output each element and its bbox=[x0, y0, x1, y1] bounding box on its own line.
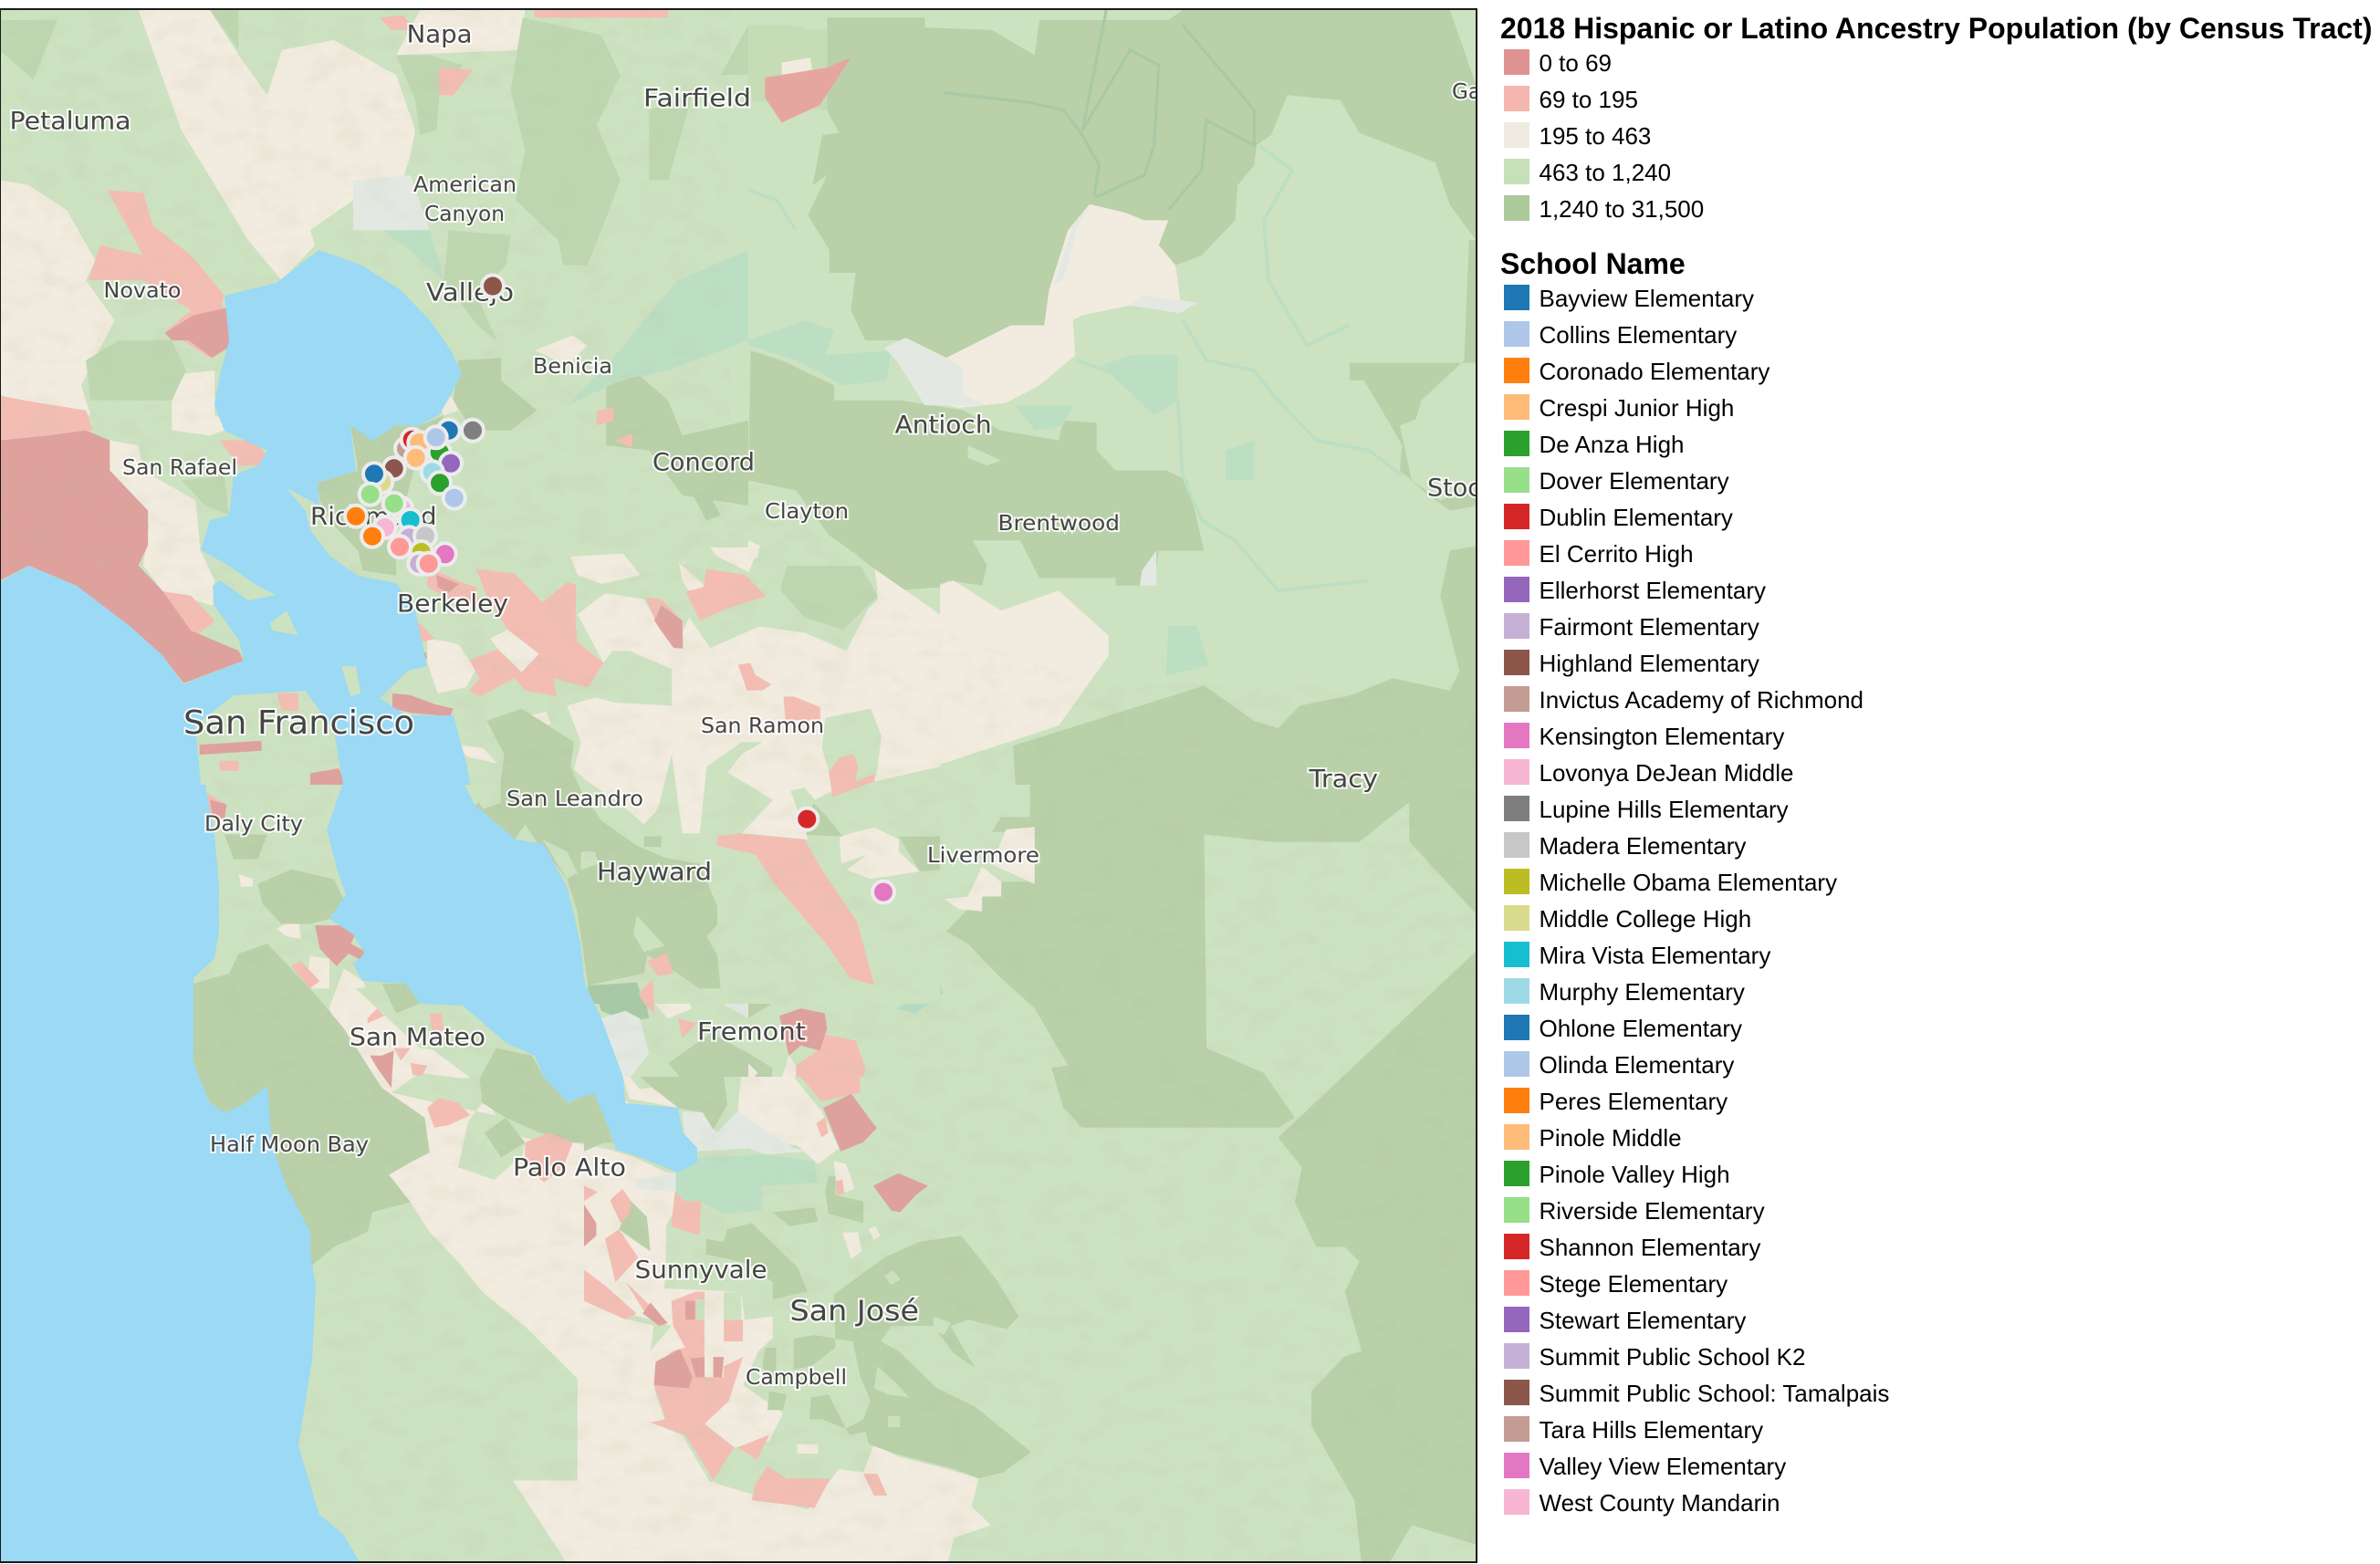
marker: Stege Elementary bbox=[418, 553, 440, 575]
legend row: Pinole Middle bbox=[1504, 1124, 2325, 1150]
legend row: El Cerrito High bbox=[1504, 540, 2325, 566]
legend row: Lupine Hills Elementary: Lupine Hills Elementary bbox=[1539, 796, 1789, 823]
legend row: Highland Elementary bbox=[1504, 650, 2325, 675]
legend row: Valley View Elementary bbox=[1504, 1453, 2325, 1478]
label: Benicia: Benicia bbox=[533, 355, 612, 379]
marker: Middle College High bbox=[371, 471, 392, 493]
label: Novato: Novato bbox=[104, 279, 181, 303]
legend row: Madera Elementary bbox=[1504, 832, 2325, 858]
legend row: Middle College High bbox=[1504, 905, 2325, 931]
legend row: 69 to 195: 69 to 195 bbox=[1539, 86, 1638, 113]
legend row: Ellerhorst Elementary bbox=[1504, 577, 2325, 602]
label: Palo Alto: Palo Alto bbox=[513, 1153, 626, 1183]
label: Petaluma: Petaluma bbox=[9, 108, 131, 135]
legend row: Dublin Elementary: Dublin Elementary bbox=[1539, 504, 1733, 531]
legend row: Summit Public School K2 bbox=[1504, 1343, 2325, 1369]
marker: Pinole Middle bbox=[405, 447, 427, 469]
label: San Francisco: San Francisco bbox=[183, 704, 414, 742]
label: Tracy: Tracy bbox=[1308, 765, 1378, 794]
legend row: Invictus Academy of Richmond bbox=[1504, 686, 2325, 712]
legend row: Stewart Elementary: Stewart Elementary bbox=[1539, 1307, 1746, 1334]
legend row: Lovonya DeJean Middle bbox=[1504, 759, 2325, 785]
legend row: Tara Hills Elementary bbox=[1504, 1416, 2325, 1442]
label: San Rafael: San Rafael bbox=[122, 456, 237, 480]
legend row: Collins Elementary: Collins Elementary bbox=[1539, 321, 1737, 349]
marker: Mira Vista Elementary bbox=[400, 509, 422, 531]
marker: Dover Elementary bbox=[383, 493, 405, 515]
legend row: De Anza High: De Anza High bbox=[1539, 431, 1684, 458]
label: Campbell: Campbell bbox=[746, 1366, 847, 1390]
legend row: Shannon Elementary: Shannon Elementary bbox=[1539, 1234, 1760, 1261]
legend row: Stewart Elementary bbox=[1504, 1307, 2325, 1332]
legend row: 1,240 to 31,500: 1,240 to 31,500 bbox=[1539, 195, 1704, 223]
legend row: Riverside Elementary: Riverside Elementary bbox=[1539, 1197, 1765, 1225]
marker: Summit Public School K2 bbox=[408, 553, 430, 575]
map frame bbox=[0, 9, 1477, 1562]
marker: Olinda Elementary bbox=[444, 487, 465, 509]
marker: Ohlone Elementary bbox=[363, 463, 385, 485]
marker: Summit Public School: Tamalpais bbox=[482, 276, 504, 297]
legend row: Pinole Valley High: Pinole Valley High bbox=[1539, 1161, 1730, 1188]
place labels bbox=[9, 20, 1536, 1390]
marker: Pinole Valley High bbox=[429, 472, 451, 494]
legend row: West County Mandarin: West County Mandarin bbox=[1539, 1489, 1780, 1517]
label: San Ramon: San Ramon bbox=[701, 714, 824, 738]
legend row: Highland Elementary: Highland Elementary bbox=[1539, 650, 1759, 677]
marker: Peres Elementary bbox=[361, 526, 383, 547]
East Bay detail overlay bbox=[392, 547, 940, 1004]
label: Brentwood: Brentwood bbox=[998, 512, 1120, 536]
marker: De Anza High bbox=[429, 442, 451, 464]
label: Antioch: Antioch bbox=[895, 411, 992, 440]
marker: Bayview Elementary bbox=[438, 420, 460, 442]
legend row: Dover Elementary: Dover Elementary bbox=[1539, 467, 1729, 495]
marker: Murphy Elementary bbox=[422, 461, 444, 483]
marker: Madera Elementary bbox=[414, 525, 436, 547]
legend row: Olinda Elementary: Olinda Elementary bbox=[1539, 1051, 1734, 1079]
legend row: West County Mandarin bbox=[1504, 1489, 2325, 1515]
label: San José: San José bbox=[790, 1295, 919, 1328]
legend row: Murphy Elementary: Murphy Elementary bbox=[1539, 978, 1745, 1006]
South Bay detail overlay bbox=[584, 1077, 1132, 1564]
legend row: Mira Vista Elementary bbox=[1504, 942, 2325, 967]
label: San Mateo: San Mateo bbox=[350, 1024, 485, 1051]
marker: Fairmont Elementary bbox=[398, 527, 420, 548]
legend row: Fairmont Elementary: Fairmont Elementary bbox=[1539, 613, 1759, 641]
map panel bbox=[0, 8, 1477, 1563]
school location markers bbox=[345, 276, 894, 903]
legend row: Peres Elementary: Peres Elementary bbox=[1539, 1088, 1728, 1115]
legend row: Pinole Valley High bbox=[1504, 1161, 2325, 1186]
legend row: Valley View Elementary: Valley View Elementary bbox=[1539, 1453, 1786, 1480]
marker: Coronado Elementary bbox=[345, 506, 367, 527]
label: Richmond: Richmond bbox=[310, 503, 436, 531]
label: Daly City: Daly City bbox=[204, 813, 303, 837]
marker: Crespi Junior High bbox=[408, 432, 430, 454]
legend row: Kensington Elementary: Kensington Elementary bbox=[1539, 723, 1784, 750]
legend row: Summit Public School K2: Summit Public School K2 bbox=[1539, 1343, 1805, 1371]
legend row: Mira Vista Elementary: Mira Vista Elementary bbox=[1539, 942, 1770, 969]
legend row: Fairmont Elementary bbox=[1504, 613, 2325, 639]
label: Berkeley: Berkeley bbox=[397, 589, 508, 619]
legend row: Crespi Junior High: Crespi Junior High bbox=[1539, 394, 1734, 422]
legend row: Ohlone Elementary bbox=[1504, 1015, 2325, 1040]
marker: Kensington Elementary bbox=[434, 543, 456, 565]
legend row: 0 to 69 bbox=[1504, 49, 1612, 77]
marker: Collins Elementary bbox=[425, 426, 447, 448]
marker: Tara Hills Elementary bbox=[395, 438, 417, 460]
legend row: Stege Elementary: Stege Elementary bbox=[1539, 1270, 1728, 1298]
legend row: Invictus Academy of Richmond: Invictus Academy of Richmond bbox=[1539, 686, 1863, 714]
legend row: Olinda Elementary bbox=[1504, 1051, 2325, 1077]
legend row: Michelle Obama Elementary: Michelle Obama Elementary bbox=[1539, 869, 1837, 896]
marker: El Cerrito High bbox=[389, 536, 411, 558]
label: Fremont: Fremont bbox=[697, 1018, 806, 1046]
legend row: Kensington Elementary bbox=[1504, 723, 2325, 748]
label: Half Moon Bay: Half Moon Bay bbox=[210, 1133, 369, 1157]
legend title: School Name: School Name bbox=[1500, 247, 1686, 280]
marker: Dublin Elementary bbox=[402, 429, 423, 451]
legend row: Lovonya DeJean Middle: Lovonya DeJean Middle bbox=[1539, 759, 1793, 787]
marker: Stewart Elementary bbox=[440, 453, 462, 474]
legend row: Lupine Hills Elementary bbox=[1504, 796, 2325, 821]
label: Sunnyvale: Sunnyvale bbox=[635, 1256, 767, 1285]
legend row: Summit Public School: Tamalpais bbox=[1504, 1380, 2325, 1405]
label: Stockton: Stockton bbox=[1427, 474, 1536, 502]
legend row: Summit Public School: Tamalpais: Summit Public School: Tamalpais bbox=[1539, 1380, 1889, 1407]
legend row: Stege Elementary bbox=[1504, 1270, 2325, 1296]
label: Livermore: Livermore bbox=[927, 844, 1039, 868]
legend: population by census tract bbox=[1500, 12, 2372, 223]
legend row: Michelle Obama Elementary bbox=[1504, 869, 2325, 894]
legend row: Tara Hills Elementary: Tara Hills Elementary bbox=[1539, 1416, 1763, 1444]
legend row: Pinole Middle: Pinole Middle bbox=[1539, 1124, 1682, 1152]
label: Vallejo: Vallejo bbox=[426, 279, 514, 307]
legend title: population: 2018 Hispanic or Latino Ancestry Population (by Census Tract) bbox=[1500, 12, 2372, 45]
label: Clayton: Clayton bbox=[765, 500, 849, 524]
marker: Riverside Elementary bbox=[360, 484, 381, 506]
legend row: Shannon Elementary bbox=[1504, 1234, 2325, 1259]
legend row: 463 to 1,240: 463 to 1,240 bbox=[1539, 159, 1671, 186]
legend row: El Cerrito High: El Cerrito High bbox=[1539, 540, 1694, 568]
basemap: census tract choropleth over land and water bbox=[0, 9, 1478, 1564]
marker: Lupine Hills Elementary bbox=[462, 420, 484, 442]
marker: Valley View Elementary bbox=[872, 881, 894, 903]
legend row: Ellerhorst Elementary: Ellerhorst Elementary bbox=[1539, 577, 1766, 604]
legend row: 0 to 69: 0 to 69 bbox=[1539, 49, 1612, 77]
label: Hayward: Hayward bbox=[597, 858, 712, 887]
legend row: Peres Elementary bbox=[1504, 1088, 2325, 1113]
legend row: Bayview Elementary: Bayview Elementary bbox=[1539, 285, 1754, 312]
legend row: Murphy Elementary bbox=[1504, 978, 2325, 1004]
label: Napa: Napa bbox=[407, 20, 473, 49]
legend row: 195 to 463: 195 to 463 bbox=[1539, 122, 1651, 150]
marker: Michelle Obama Elementary bbox=[411, 541, 433, 563]
marker: Highland Elementary bbox=[383, 457, 405, 479]
legend row: Coronado Elementary: Coronado Elementary bbox=[1539, 358, 1769, 385]
place labels beneath markers: Vallejo and Richmond bbox=[310, 279, 514, 531]
label: American: American bbox=[413, 173, 517, 197]
marker: Shannon Elementary bbox=[796, 808, 818, 830]
label: Canyon: Canyon bbox=[424, 203, 505, 226]
legend: school name bbox=[1500, 247, 1889, 1517]
legend row: Middle College High: Middle College High bbox=[1539, 905, 1751, 933]
label: Concord: Concord bbox=[652, 449, 755, 476]
legend row: Madera Elementary: Madera Elementary bbox=[1539, 832, 1746, 860]
label: San Leandro: San Leandro bbox=[506, 787, 643, 811]
marker: Ellerhorst Elementary bbox=[423, 442, 444, 464]
label: Galt: Galt bbox=[1452, 80, 1495, 104]
label: Fairfield: Fairfield bbox=[643, 84, 751, 113]
marker: Lovonya DeJean Middle bbox=[374, 516, 396, 538]
legend row: Ohlone Elementary: Ohlone Elementary bbox=[1539, 1015, 1742, 1042]
legend row: Riverside Elementary bbox=[1504, 1197, 2325, 1223]
marker: West County Mandarin bbox=[391, 497, 412, 519]
